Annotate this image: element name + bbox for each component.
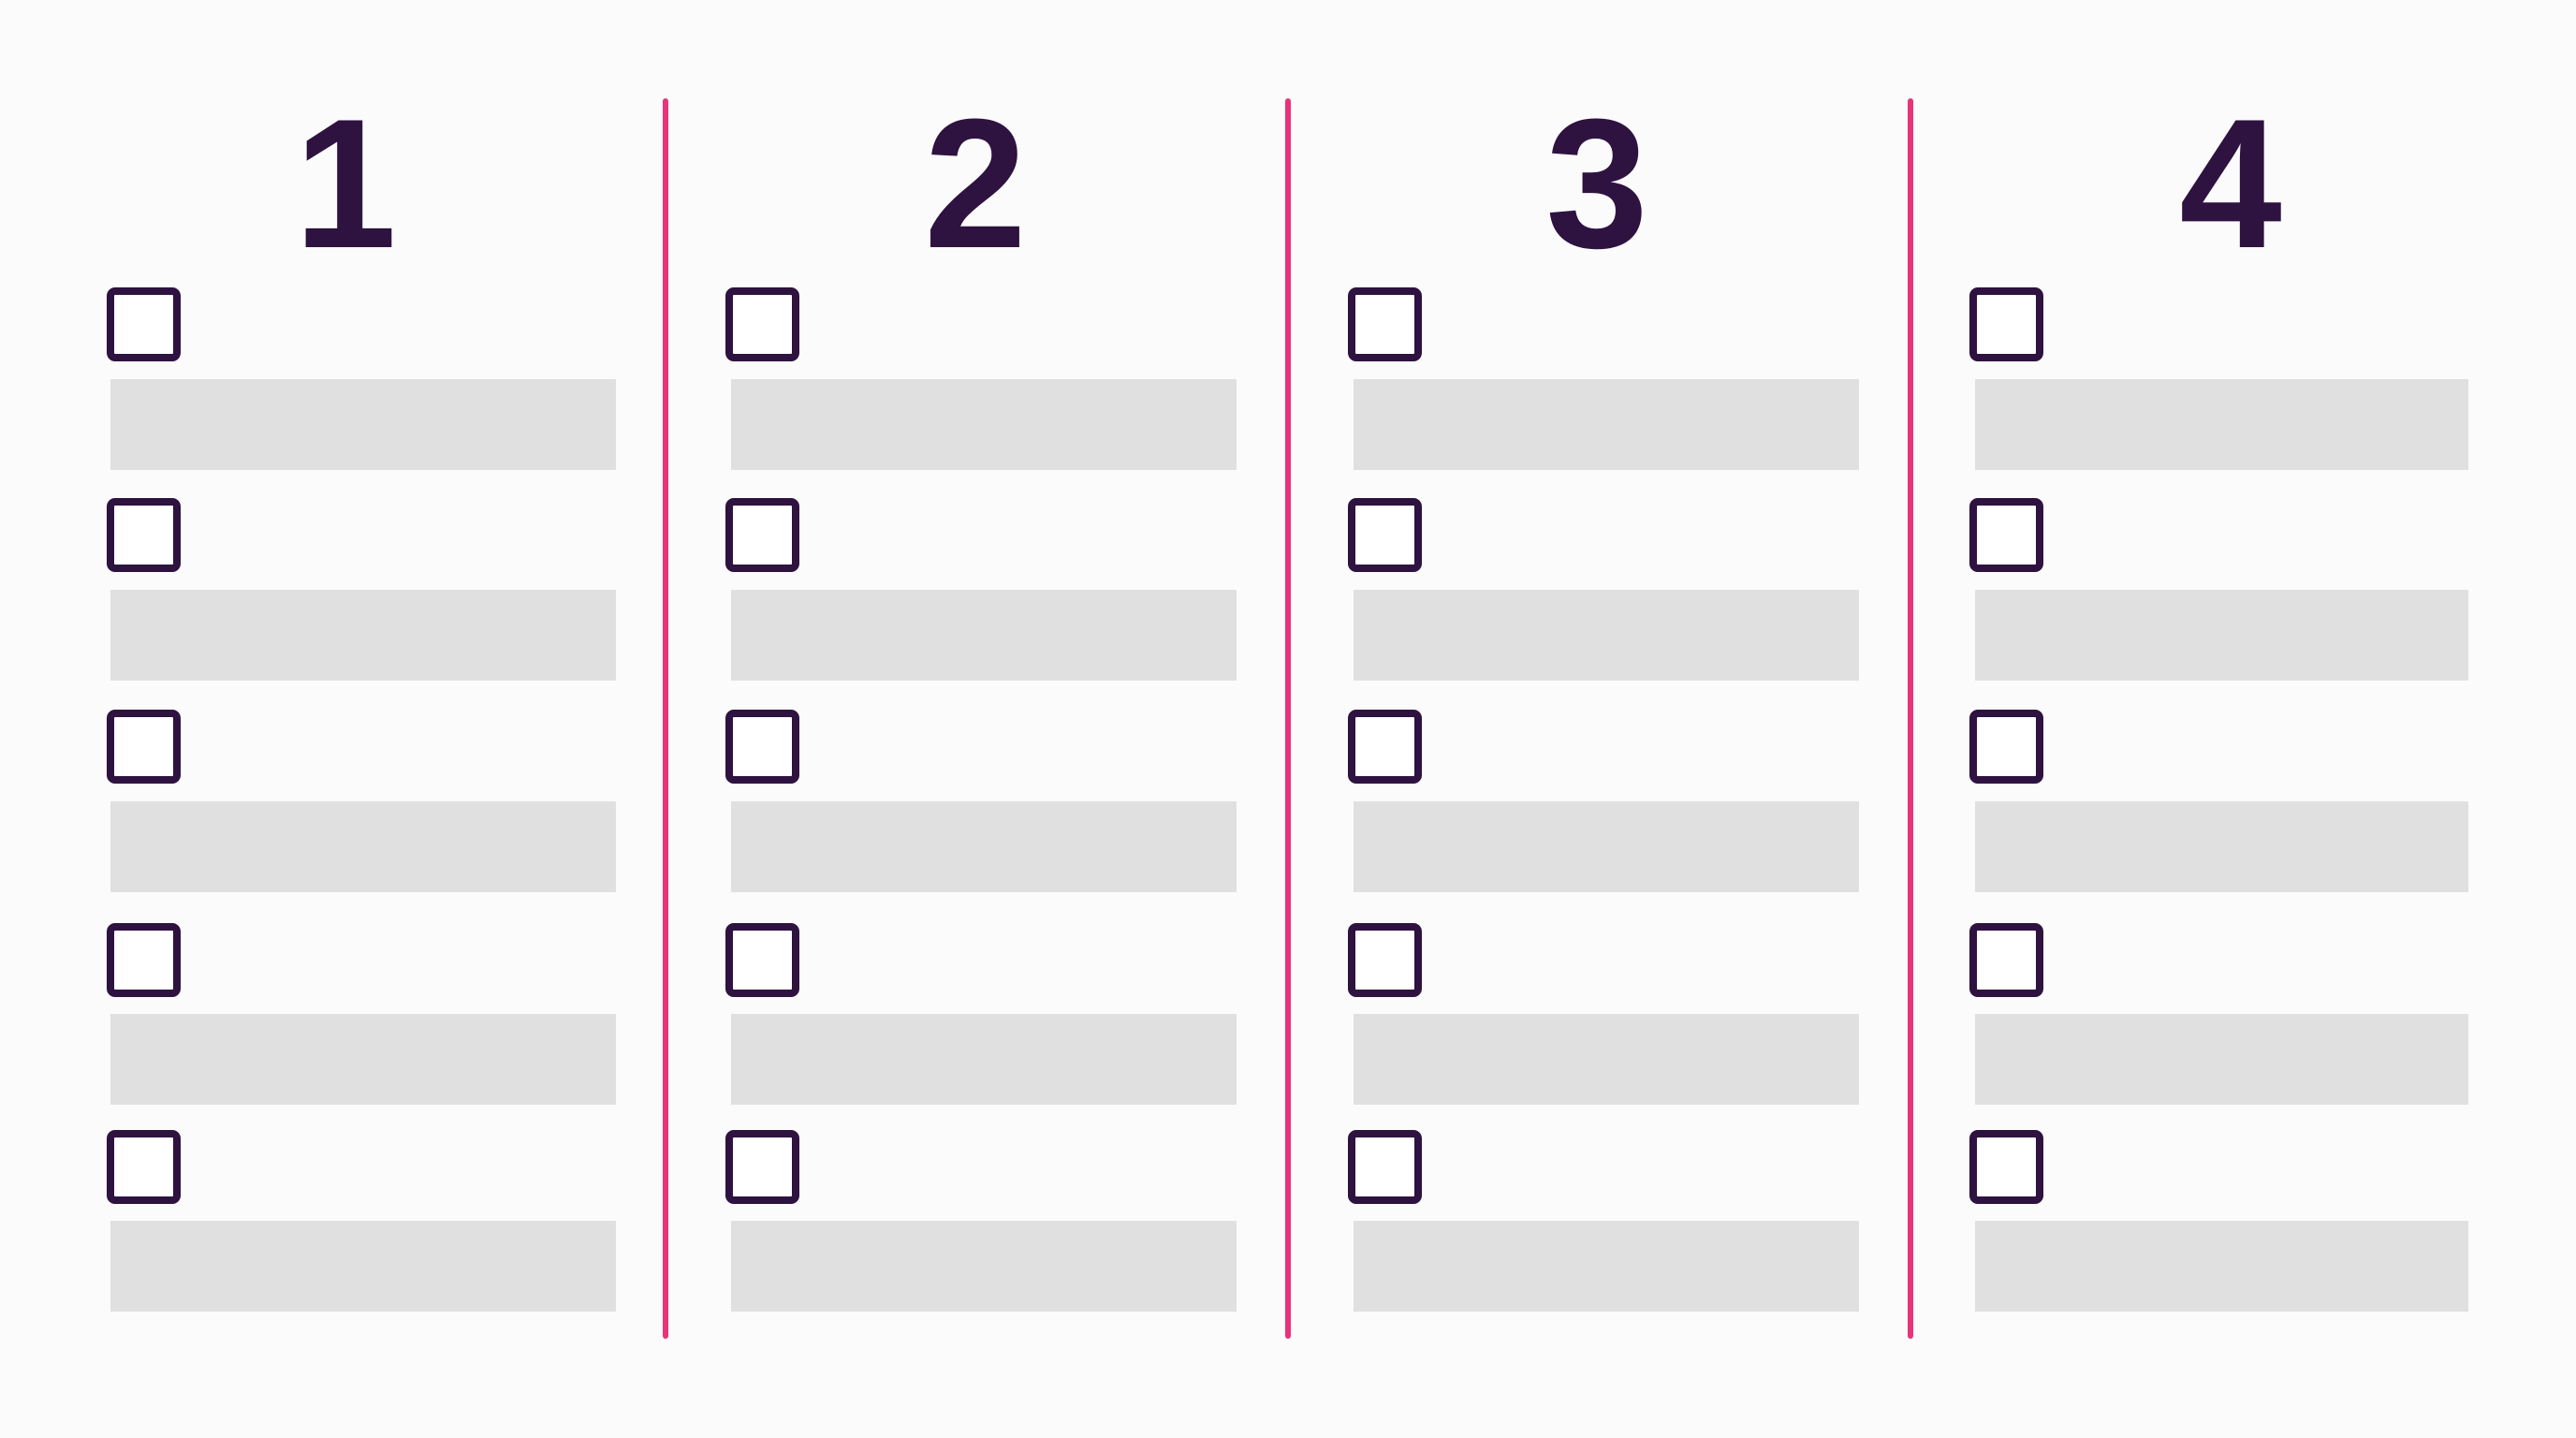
bar row 4 [731,1014,1237,1105]
checkbox row 1 [1348,287,1422,361]
bar row 3 [1975,801,2468,892]
bar row 5 [110,1221,616,1312]
checkbox row 2 [107,498,181,572]
bar row 5 [1354,1221,1859,1312]
bar row 1 [110,379,616,470]
checkbox row 3 [725,710,799,784]
bar row 4 [1975,1014,2468,1105]
checkbox row 4 [107,923,181,997]
bar row 2 [110,590,616,681]
bar row 2 [731,590,1237,681]
number 1 heading: 1 [294,81,397,286]
checkbox row 1 [1969,287,2043,361]
checkbox row 3 [1348,710,1422,784]
bar row 3 [731,801,1237,892]
checkbox row 2 [1969,498,2043,572]
bar row 1 [1975,379,2468,470]
checkbox row 4 [725,923,799,997]
checkbox row 2 [725,498,799,572]
number 2 heading: 2 [924,81,1027,286]
bar row 5 [1975,1221,2468,1312]
bar row 1 [731,379,1237,470]
bar row 1 [1354,379,1859,470]
checkbox row 1 [107,287,181,361]
number 3 heading: 3 [1545,81,1648,286]
divider 2 [1285,98,1291,1339]
checkbox row 2 [1348,498,1422,572]
panel: column 4 checklist [1969,287,2468,1312]
bar row 4 [110,1014,616,1105]
checkbox row 4 [1348,923,1422,997]
bar row 2 [1975,590,2468,681]
bar row 5 [731,1221,1237,1312]
number 4 heading: 4 [2179,81,2282,286]
checkbox row 1 [725,287,799,361]
bar row 3 [1354,801,1859,892]
panel: column 2 checklist [725,287,1237,1312]
checkbox row 5 [1348,1130,1422,1204]
bar row 2 [1354,590,1859,681]
checkbox row 5 [107,1130,181,1204]
divider 1 [663,98,668,1339]
checkbox row 4 [1969,923,2043,997]
bar row 3 [110,801,616,892]
checkbox row 5 [1969,1130,2043,1204]
checkbox row 5 [725,1130,799,1204]
bar row 4 [1354,1014,1859,1105]
checkbox row 3 [1969,710,2043,784]
panel: column 3 checklist [1348,287,1859,1312]
panel: column 1 checklist [107,287,616,1312]
checkbox row 3 [107,710,181,784]
divider 3 [1908,98,1913,1339]
